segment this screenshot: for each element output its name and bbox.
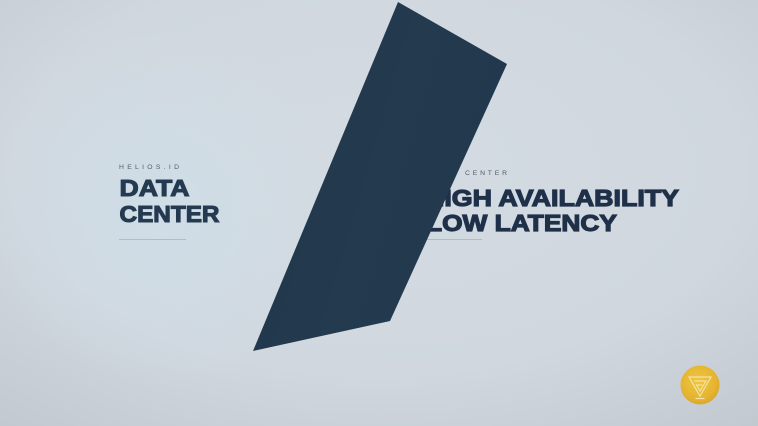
left eyebrow label: HELIOS.ID [119, 164, 179, 171]
left heading: CENTER [120, 201, 220, 227]
right eyebrow label: CENTER [465, 170, 507, 177]
logo triangle mark [689, 377, 711, 398]
right heading [425, 185, 679, 236]
left text block [119, 164, 220, 240]
right heading: LOW LATENCY [426, 210, 617, 236]
gold logo badge [680, 366, 720, 404]
right text block [415, 170, 679, 240]
dark rotated panel [253, 2, 507, 351]
left underline [119, 239, 186, 240]
right underline [415, 239, 482, 240]
left heading: DATA [120, 175, 190, 201]
left heading [120, 175, 220, 227]
right heading: HIGH AVAILABILITY [425, 185, 679, 211]
